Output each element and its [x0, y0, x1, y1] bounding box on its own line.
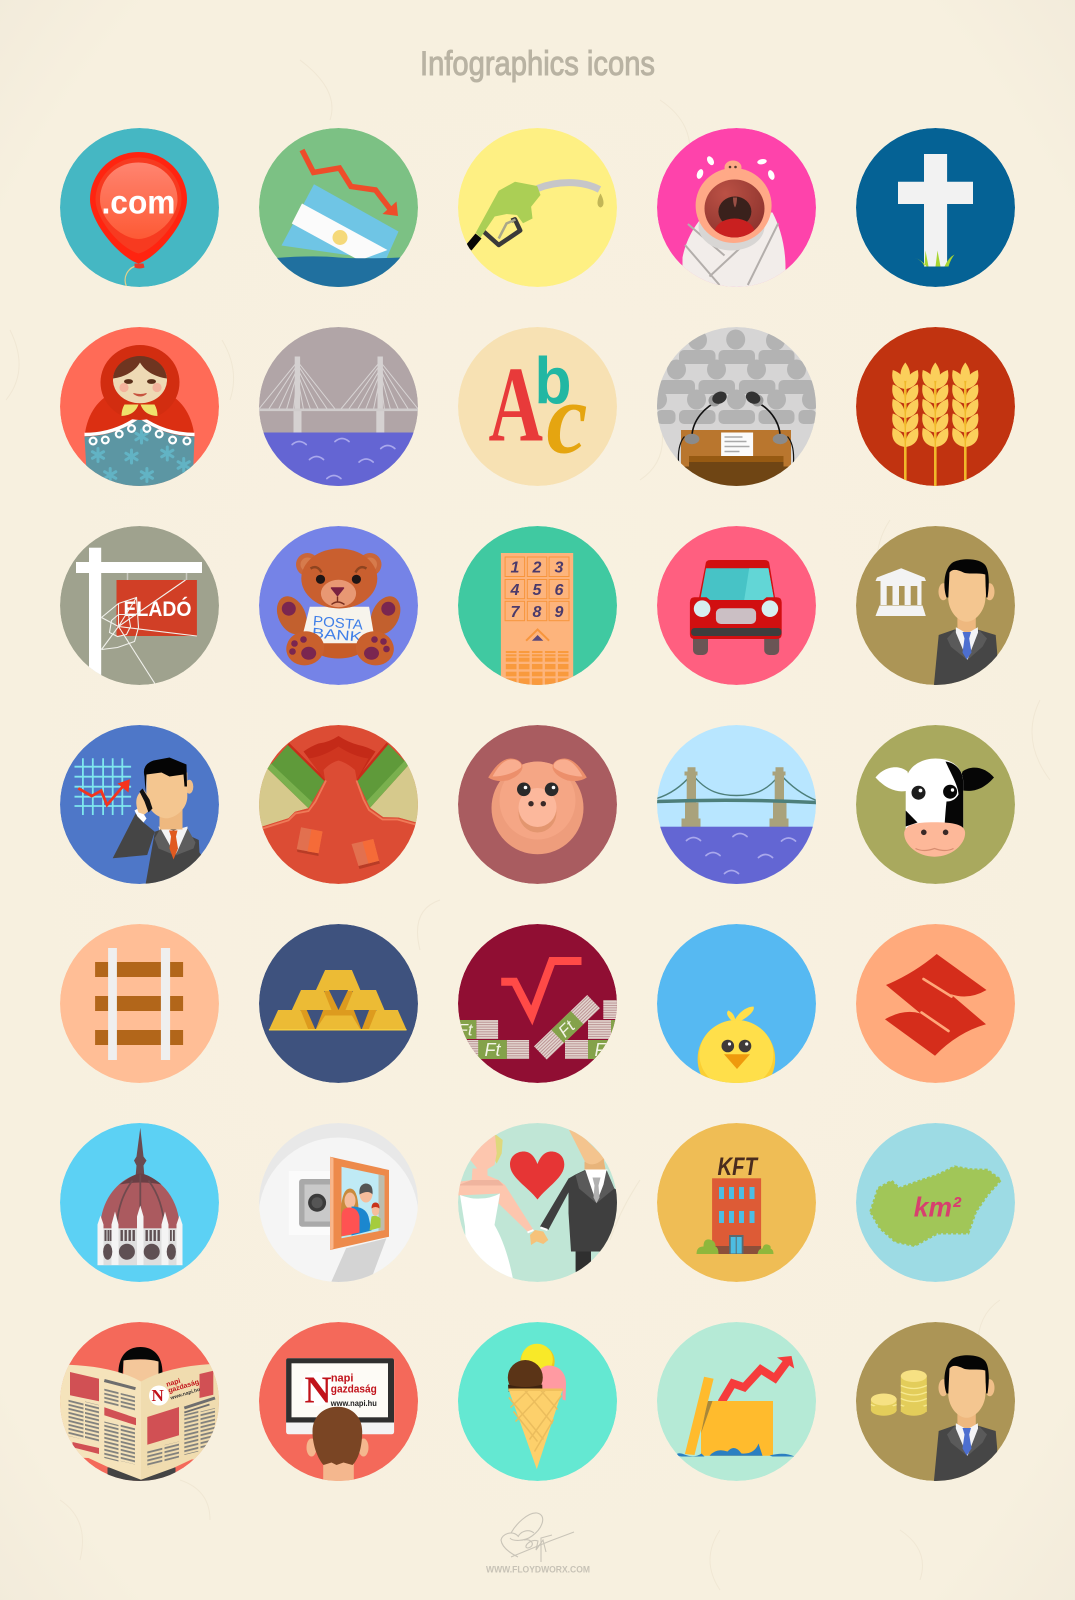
icon: square root and forint notes: Ft [484, 1040, 501, 1060]
box lid [685, 1377, 714, 1455]
head [696, 168, 772, 243]
coin stack tall [901, 1376, 927, 1412]
car body [690, 597, 782, 639]
dome [100, 1174, 180, 1228]
balloon body [90, 152, 187, 264]
icon: square root and forint notes [456, 924, 619, 1083]
icon: person at computer, napi gazdaság site [259, 1322, 418, 1486]
box [701, 1401, 773, 1456]
bear ears [296, 553, 319, 576]
yellow scarf [122, 404, 158, 416]
eyes [912, 786, 926, 800]
eyes [517, 782, 531, 796]
heart [510, 1152, 564, 1200]
ears [876, 767, 912, 791]
dark bar sides [316, 990, 361, 1010]
headlights [694, 600, 710, 617]
icon: wheat [856, 327, 1015, 488]
spire [134, 1128, 146, 1178]
face [113, 362, 167, 404]
muzzle [904, 822, 965, 857]
km2 label: km² [914, 1192, 961, 1223]
water [277, 256, 400, 287]
icon: Hungary map km2 [856, 1123, 1015, 1282]
groom head [569, 1130, 605, 1168]
icon: chain bridge [656, 725, 816, 887]
reader head [124, 1360, 158, 1386]
bank building [876, 568, 926, 616]
chart arrow [78, 784, 124, 805]
icon: pig [458, 725, 617, 884]
nose [724, 160, 742, 170]
icon: keypad building: 5 [533, 582, 543, 599]
red sign [116, 580, 197, 636]
icon: wedding couple [454, 1123, 622, 1284]
audience [648, 330, 821, 424]
viewer head [306, 1438, 316, 1456]
KFT sign: KFT [718, 1153, 759, 1181]
icon: man reading newspaper: gazdaság [167, 1379, 200, 1395]
hood [100, 345, 180, 420]
sand banks [254, 760, 308, 830]
monitor [286, 1358, 394, 1434]
S slits [922, 979, 952, 1031]
debris boxes [297, 849, 318, 856]
POSTA BANK text: POSTA [312, 612, 364, 633]
icon: keypad building: 4 [509, 582, 519, 599]
beak [724, 1054, 750, 1069]
hose [538, 183, 600, 190]
trigger guard [484, 219, 520, 245]
nozzle body [476, 182, 540, 238]
neck and head [160, 810, 182, 830]
bushes [696, 1239, 774, 1254]
icon: cable-stayed bridge [258, 327, 418, 486]
frame [330, 1157, 389, 1250]
title: Infographics icons [420, 45, 655, 83]
icon: person at computer, napi gazdaság site: gazdaság [331, 1384, 377, 1396]
icon: matryoshka doll [60, 327, 219, 488]
grille [716, 608, 756, 624]
newspaper [50, 1364, 141, 1480]
icon: fuel nozzle [458, 128, 617, 287]
website credit: WWW.FLOYDWORX.COM [486, 1564, 590, 1574]
icon: safe behind family picture [258, 1123, 418, 1298]
flood [260, 760, 416, 834]
cables [258, 362, 418, 410]
feet [284, 628, 327, 668]
ears [892, 362, 978, 447]
man [934, 1355, 997, 1486]
gaps [307, 990, 369, 1030]
icon: crying baby [657, 128, 816, 290]
letter A: A [488, 346, 543, 464]
red blocks [70, 1371, 213, 1454]
deck [258, 408, 418, 411]
icon: red mud flood [254, 725, 424, 884]
man [934, 559, 997, 690]
icon: keypad building: 7 [510, 604, 520, 621]
head [906, 758, 963, 830]
keypad [505, 557, 569, 621]
ears [488, 758, 522, 781]
windshield [700, 568, 774, 600]
bride hair and head [488, 1134, 503, 1164]
S mark [885, 954, 986, 1056]
icon: red car [657, 526, 816, 685]
newspaper logo [149, 1386, 169, 1406]
bride dress [460, 1194, 514, 1284]
icon: man reading newspaper: www.napi.hu [169, 1387, 201, 1402]
sleepers [95, 962, 183, 1045]
cross shape [898, 154, 973, 266]
podium [681, 430, 791, 468]
head [492, 762, 584, 854]
icon: keypad building: 1 [510, 560, 519, 576]
icon: railway track [60, 924, 219, 1083]
tears [695, 155, 776, 181]
water [674, 1444, 794, 1456]
river [656, 827, 816, 887]
deck [656, 800, 816, 802]
snout [518, 792, 556, 832]
entrance marker [526, 630, 549, 641]
windows [719, 1187, 754, 1223]
stalks [905, 378, 965, 488]
mouth [704, 180, 764, 238]
root symbol [501, 961, 582, 1016]
body [302, 608, 374, 658]
icon: man reading newspaper [50, 1322, 230, 1482]
icon: parliament dome [60, 1123, 219, 1282]
diagonal note stack: Ft [555, 1016, 580, 1041]
icon: cross [856, 128, 1015, 287]
right note stacks [603, 1000, 619, 1019]
post [89, 548, 101, 678]
eyes [722, 1040, 734, 1052]
rails [108, 948, 170, 1060]
ELADÓ text: ELADÓ [124, 597, 192, 621]
door [729, 1235, 744, 1254]
wheels [693, 630, 708, 655]
lace trim [84, 416, 194, 434]
falling arrow [302, 150, 392, 212]
icon: gold bars [259, 924, 418, 1083]
spout tip [466, 234, 482, 250]
icon: person at computer, napi gazdaság site: N [304, 1370, 332, 1412]
cone [509, 1390, 562, 1469]
icon: square root and forint notes: Ft [458, 1020, 474, 1040]
icon: man reading newspaper: N [152, 1386, 164, 1405]
groom shirt and tie [585, 1170, 608, 1202]
letter c: c [546, 362, 588, 476]
paper [721, 432, 753, 456]
icon: keypad building: 9 [555, 604, 564, 621]
icon: box with rising arrow [657, 1322, 816, 1481]
safe [299, 1179, 335, 1227]
icon: for-sale sign with cobweb [60, 526, 219, 685]
diagonal note stack [534, 995, 601, 1061]
base [98, 1228, 182, 1265]
microphones [692, 400, 780, 436]
joined hands [530, 1230, 548, 1245]
window grid [506, 651, 568, 686]
icon: Suzuki logo [856, 924, 1015, 1083]
icon: square root and forint notes: Ft [594, 1040, 611, 1060]
bars [269, 970, 407, 1030]
icon: keypad building: 8 [533, 604, 542, 621]
bumper [691, 628, 782, 636]
groom suit [568, 1170, 622, 1252]
bride body [454, 1168, 534, 1232]
icon: .com balloon [60, 128, 219, 287]
coin stack short [871, 1400, 897, 1410]
suit [108, 1468, 176, 1482]
icon: Abc letters [458, 327, 617, 486]
family [341, 1184, 380, 1236]
black patches [944, 762, 963, 830]
rising arrow [721, 1362, 786, 1402]
icon: press podium with audience [648, 327, 821, 488]
icon: businessman with bank [856, 526, 1015, 690]
icon: man reading newspaper: napi [166, 1378, 181, 1389]
flag [282, 184, 398, 260]
icon: businessman on phone with chart [60, 725, 224, 886]
towers [295, 356, 300, 412]
chains [656, 774, 816, 800]
site logo [300, 1372, 334, 1406]
icon: keypad building [458, 526, 617, 688]
head [301, 548, 377, 608]
doll body [84, 398, 194, 436]
grass [914, 250, 954, 266]
burst reservoir [304, 736, 376, 780]
text columns [68, 1400, 84, 1440]
scoops [520, 1344, 555, 1379]
icon: sinking flag with falling arrow [258, 128, 418, 288]
site name: napi [331, 1372, 353, 1384]
icon: Posta Bank teddy bear [259, 526, 418, 685]
signature [501, 1513, 574, 1562]
icon: Posta Bank teddy bear: BANK [311, 624, 363, 645]
left note stacks [476, 1020, 498, 1039]
building [712, 1178, 761, 1246]
shirt [303, 607, 374, 643]
river [258, 432, 418, 486]
icon: ice cream cone [458, 1322, 617, 1481]
windows [103, 1230, 176, 1260]
hand and phone [136, 790, 152, 814]
chart grid [74, 758, 131, 815]
building [501, 553, 573, 688]
icon: businessman with gold coins [856, 1322, 1015, 1486]
swaddle [682, 212, 786, 290]
arms [271, 591, 312, 639]
cabin [698, 560, 776, 600]
cobweb [102, 580, 197, 684]
shirt and tie [158, 826, 188, 854]
icon: KFT company building [657, 1123, 816, 1282]
towers [682, 767, 700, 827]
icon: keypad building: 2 [532, 560, 542, 576]
map shape [870, 1167, 1001, 1246]
icon: cow [856, 725, 1015, 884]
icon: person at computer, napi gazdaság site: www.napi.hu [330, 1398, 377, 1408]
picture shadow [330, 1238, 386, 1284]
hangers [128, 572, 186, 580]
letter b: b [534, 344, 572, 418]
icon: keypad building: 6 [555, 582, 564, 599]
body [698, 1020, 775, 1098]
.com label: .com [102, 184, 176, 220]
icon: chick [657, 924, 816, 1098]
green banks [268, 744, 325, 808]
suit [145, 826, 224, 886]
icon: keypad building: 3 [555, 560, 564, 576]
tuft [727, 1006, 754, 1020]
